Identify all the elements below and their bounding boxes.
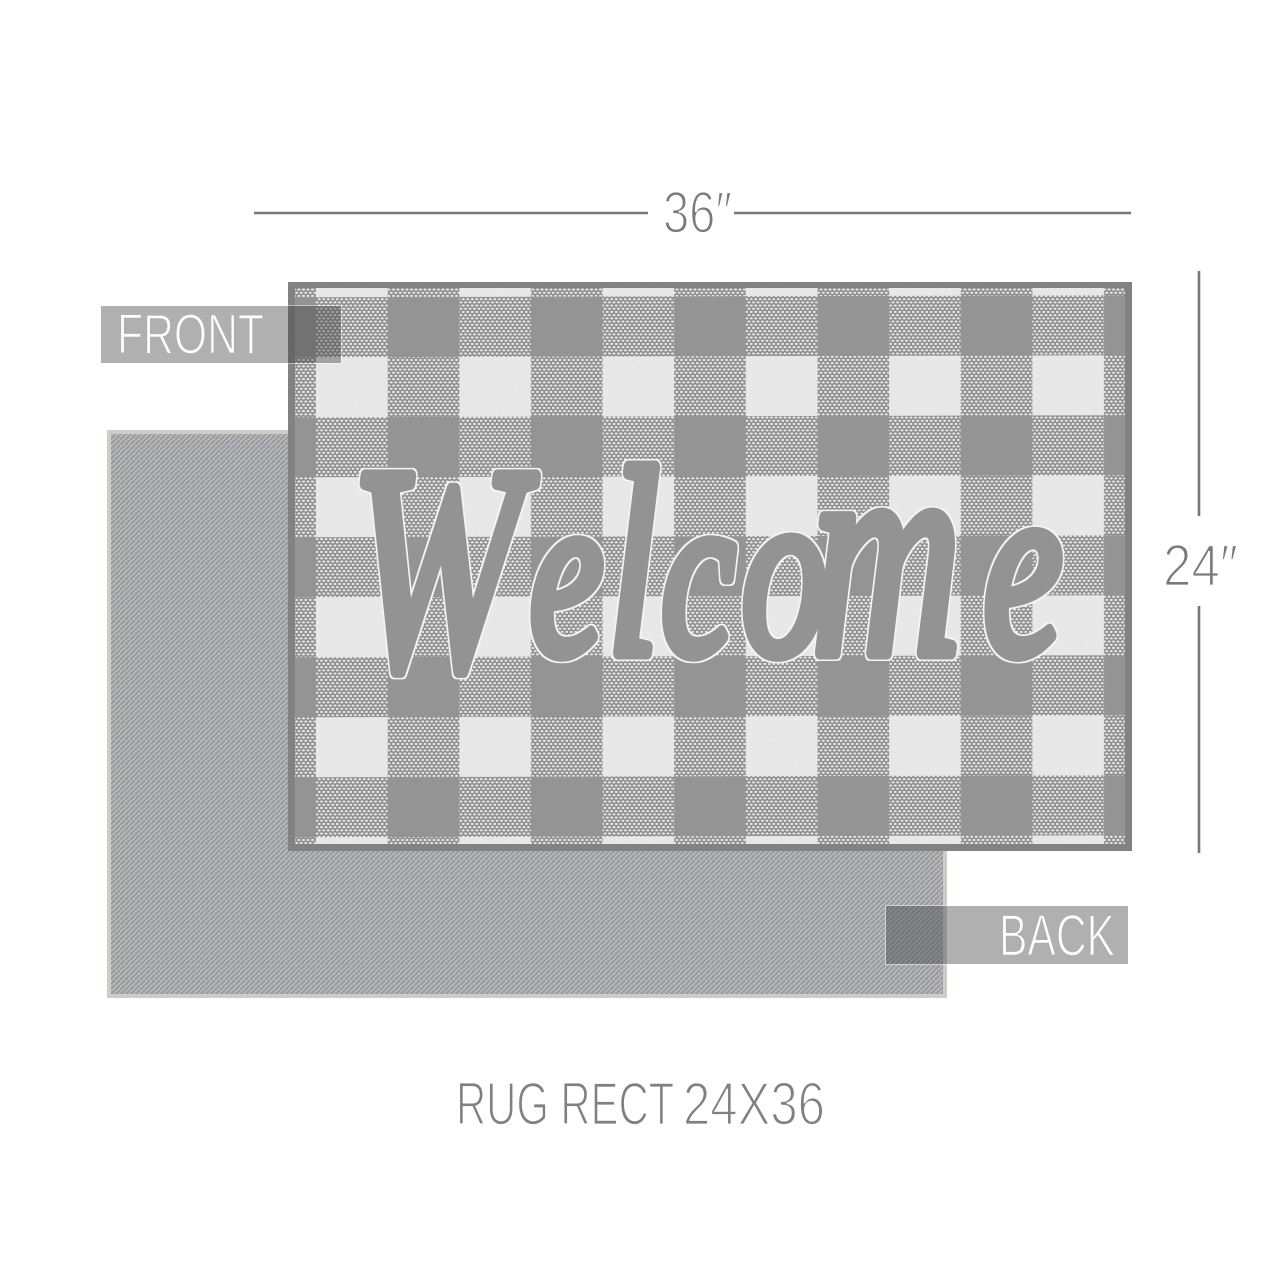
rug lettering: Welcome: c	[661, 443, 735, 705]
label: BACK: BACK	[999, 904, 1115, 968]
rug lettering: Welcome: l	[608, 415, 660, 712]
label: BACK	[886, 904, 1128, 968]
label: FRONT: FRONT	[117, 302, 264, 366]
caption: product name: 24X36	[683, 1070, 825, 1138]
height dimension: 24 inches: 24″	[1163, 534, 1238, 598]
rug back side	[107, 430, 947, 998]
rug front side with buffalo check	[288, 282, 1132, 851]
rug lettering: Welcome: o	[742, 439, 827, 706]
rug lettering: Welcome: e	[530, 443, 603, 705]
rug lettering: Welcome: W	[351, 406, 536, 731]
rug lettering: Welcome: e	[983, 428, 1062, 709]
width dimension: 36 inches: 36″	[663, 180, 732, 246]
caption: product name: RUG RECT	[456, 1070, 685, 1138]
rug lettering: Welcome: m	[812, 391, 961, 718]
rug lettering: Welcome	[351, 391, 1062, 731]
